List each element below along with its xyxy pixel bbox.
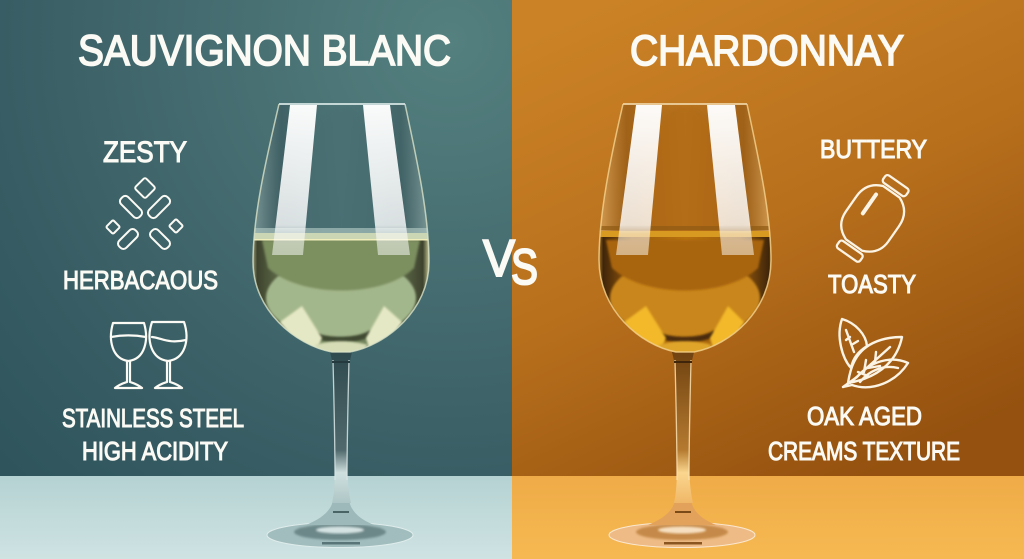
label: Herbacaous: HERBACAOUS	[63, 265, 218, 295]
label: Toasty: TOASTY	[828, 269, 916, 299]
glass stem	[672, 352, 694, 503]
text: Oak aged, creams texture: CREAMS TEXTURE	[768, 436, 960, 466]
icon: zest pieces	[106, 177, 183, 251]
wine glass: Chardonnay	[596, 104, 776, 548]
heading: Sauvignon Blanc: SAUVIGNON BLANC	[78, 27, 451, 75]
versus label: S	[511, 239, 538, 295]
text: Stainless steel, high acidity: HIGH ACIDITY	[82, 436, 228, 466]
label: Zesty: ZESTY	[103, 136, 187, 169]
glass stem	[330, 352, 352, 503]
versus label: V	[483, 230, 515, 288]
glass bowl	[250, 104, 430, 358]
label: Buttery: BUTTERY	[820, 134, 927, 164]
icon: butter jar	[826, 167, 920, 270]
text: Oak aged, creams texture: OAK AGED	[807, 401, 922, 431]
icon: two wine glasses	[111, 322, 186, 388]
text: Oak aged, creams texture	[768, 401, 960, 466]
heading: Chardonnay: CHARDONNAY	[630, 27, 904, 75]
glass bowl	[596, 104, 776, 357]
wine glass: Sauvignon Blanc	[250, 104, 430, 548]
text: Stainless steel, high acidity	[62, 403, 244, 466]
versus label	[483, 230, 538, 295]
panel: Sauvignon Blanc background	[0, 0, 512, 559]
text: Stainless steel, high acidity: STAINLESS STEEL	[62, 403, 244, 433]
glass base	[267, 500, 413, 548]
panel: Chardonnay background	[512, 0, 1024, 559]
icon: leaves	[840, 319, 908, 387]
glass base	[609, 500, 755, 548]
